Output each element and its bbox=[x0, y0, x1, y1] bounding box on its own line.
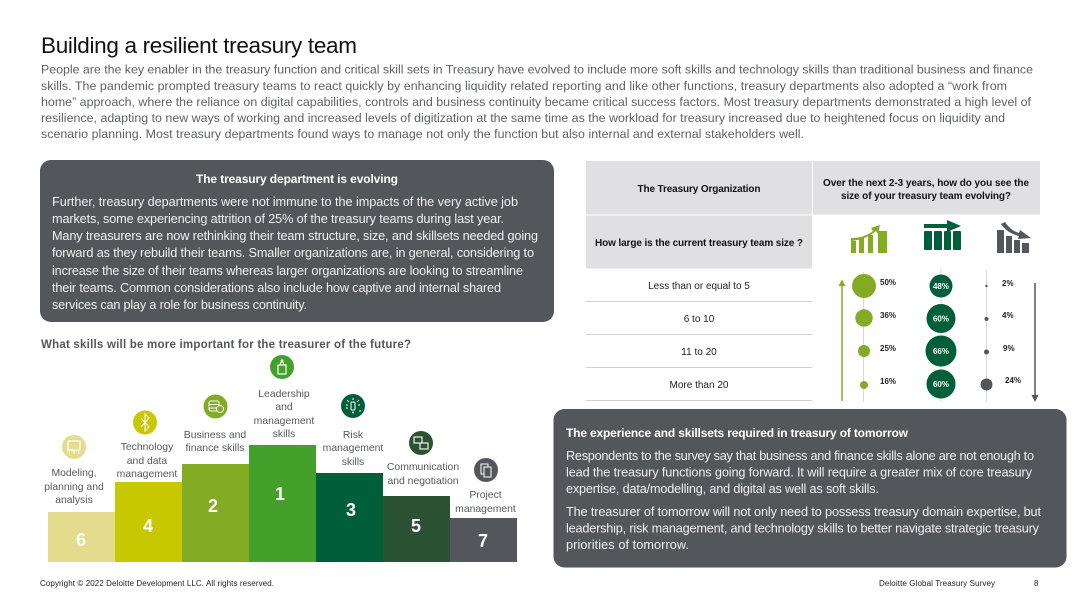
icon: presentation board bbox=[62, 435, 86, 459]
label: technology: Technology bbox=[121, 442, 174, 453]
label: business: Business and bbox=[184, 430, 246, 441]
label: leadership bbox=[254, 389, 314, 440]
icon: speech bubbles bbox=[409, 431, 433, 455]
label: project bbox=[455, 490, 516, 515]
header cell: team size question: How large is the current treasury team size ? bbox=[595, 238, 803, 249]
bar: rank 7 project: 7 bbox=[478, 531, 488, 551]
skills chart heading: What skills will be more important for the treasurer of the future? bbox=[41, 339, 411, 351]
label: modeling: analysis bbox=[55, 495, 93, 506]
panel body text: Further, treasury departments were not immune to the impacts of the very active job bbox=[52, 195, 518, 209]
icon: growth chart bbox=[851, 225, 887, 253]
icon: stable chart bbox=[924, 220, 961, 250]
panel body text: Many treasurers are now rethinking their team structure, size, and skillsets needed going bbox=[52, 229, 538, 243]
panel body text: lead the treasury functions going forward. It will require a greater mix of core treasury bbox=[566, 466, 1033, 480]
bar: rank 5 communication: 5 bbox=[411, 516, 421, 536]
label: project: management bbox=[455, 504, 516, 515]
chart: stable bubbles: 66% bbox=[933, 347, 949, 356]
panel: experience and skillsets bbox=[554, 409, 1066, 568]
label: technology bbox=[117, 442, 177, 480]
bar: rank 4 technology: 4 bbox=[143, 516, 153, 536]
label: communication bbox=[387, 462, 459, 487]
row labels: More than 20 bbox=[670, 380, 729, 391]
label: risk: skills bbox=[342, 457, 364, 468]
row labels bbox=[648, 281, 750, 391]
label: business bbox=[184, 430, 246, 454]
chart: increase bubbles: 36% bbox=[880, 311, 896, 320]
label: risk: management bbox=[323, 443, 383, 454]
panel body text: priorities of tomorrow. bbox=[566, 538, 689, 552]
chart: increase bubbles: 25% bbox=[880, 344, 896, 353]
footer: page number: 8 bbox=[1034, 579, 1039, 588]
label: risk: Risk bbox=[343, 430, 364, 441]
header cell: team size question bbox=[586, 216, 812, 268]
label: leadership: skills bbox=[273, 429, 295, 440]
label: technology: and data bbox=[127, 456, 167, 467]
label: modeling bbox=[44, 468, 104, 506]
chart: decrease bubbles: 24% bbox=[1005, 376, 1021, 385]
label: leadership: and bbox=[275, 402, 293, 413]
icon: finance coins bbox=[204, 394, 228, 418]
intro text block: People are the key enabler in the treasury function and critical skill sets in Treasury have evolved to include more soft skills and technology skills than traditional business and finance bbox=[41, 62, 1033, 76]
label: communication: Communication bbox=[387, 462, 459, 473]
label: leadership: Leadership bbox=[258, 389, 310, 400]
panel body text bbox=[52, 195, 538, 312]
intro text block: home” approach, where the reliance on digital capabilities, controls and business continuity became critical success factors. Most treasury departments demonstrated a high level of bbox=[41, 95, 1032, 109]
table: treasury organization bbox=[586, 161, 1040, 400]
bar: rank 3 risk: 3 bbox=[346, 500, 356, 520]
intro text block: resilience, adapting to new ways of working and increased levels of digitization at the same time as the workload for treasury increased due to heightened focus on liquidity and bbox=[41, 111, 1005, 125]
footer: copyright: Copyright © 2022 Deloitte Development LLC. All rights reserved. bbox=[40, 579, 274, 588]
label: business: finance skills bbox=[186, 443, 244, 454]
chart: decrease bubbles bbox=[980, 270, 1021, 402]
bar: rank 7 project bbox=[450, 518, 517, 562]
panel body text: Respondents to the survey say that business and finance skills alone are not enough to bbox=[566, 449, 1034, 463]
bar: rank 6 modeling bbox=[48, 512, 115, 562]
chart: increase bubbles bbox=[852, 272, 896, 402]
arrow: down bbox=[1032, 283, 1038, 402]
panel heading: The treasury department is evolving bbox=[196, 172, 398, 186]
chart: decrease bubbles: 4% bbox=[1002, 311, 1014, 320]
bar: rank 4 technology bbox=[115, 482, 182, 562]
chart: increase bubbles: 50% bbox=[880, 278, 896, 287]
bar: rank 5 communication bbox=[383, 496, 450, 562]
icon: risk bulb bbox=[341, 394, 365, 418]
panel body text: leadership, risk management, and technology skills to better navigate strategic treasury bbox=[566, 522, 1040, 536]
icon: declining chart bbox=[997, 222, 1031, 253]
title: Building a resilient treasury team bbox=[41, 33, 357, 58]
label: leadership: management bbox=[254, 416, 314, 427]
chart: decrease bubbles: 2% bbox=[1002, 279, 1014, 288]
header cell: next 2-3 years: Over the next 2-3 years, how do you see the bbox=[823, 178, 1029, 189]
bar: rank 3 risk bbox=[316, 473, 383, 562]
label: communication: and negotiation bbox=[387, 476, 459, 487]
intro text block: scenario planning. Most treasury departments found ways to manage not only the function but also internal and external stakeholders well. bbox=[41, 127, 804, 141]
chart: skills staircase bbox=[44, 355, 517, 562]
chart: stable bubbles: 60% bbox=[933, 380, 949, 389]
arrow: up bbox=[838, 280, 846, 401]
panel: the treasury department is evolving bbox=[40, 160, 554, 322]
panel body text: increase the size of their teams whereas larger organizations are looking to streamline bbox=[52, 264, 523, 278]
header cell: organization bbox=[586, 161, 812, 214]
header cell: next 2-3 years: size of your treasury team evolving? bbox=[841, 191, 1011, 202]
panel body text: services can play a role for business continuity. bbox=[52, 298, 307, 312]
panel body text: markets, some experiencing attrition of 25% of the treasury teams during last year. bbox=[52, 212, 504, 226]
chart: stable bubbles bbox=[926, 268, 956, 402]
panel body text: The treasurer of tomorrow will not only need to possess treasury domain expertise, but bbox=[566, 505, 1041, 519]
intro text block bbox=[41, 62, 1033, 141]
panel body text bbox=[566, 449, 1041, 552]
icon: bluetooth bbox=[133, 410, 157, 434]
panel body text: their teams. Common considerations also include how captive and internal shared bbox=[52, 281, 501, 295]
header cell: organization: The Treasury Organization bbox=[638, 184, 760, 195]
label: modeling: Modeling, bbox=[51, 468, 97, 479]
row labels: Less than or equal to 5 bbox=[648, 281, 750, 292]
bar: rank 1 leadership: 1 bbox=[275, 484, 285, 504]
row labels: 6 to 10 bbox=[684, 314, 715, 325]
bar: rank 2 business: 2 bbox=[208, 496, 218, 516]
chart: stable bubbles: 48% bbox=[933, 282, 949, 291]
panel body text: forward as they rebuild their teams. Smaller organizations are, in general, considering to bbox=[52, 246, 534, 260]
bar: rank 1 leadership bbox=[249, 445, 316, 562]
label: project: Project bbox=[469, 490, 502, 501]
icon: documents bbox=[474, 458, 498, 482]
header cell: next 2-3 years bbox=[813, 161, 1040, 214]
chart: stable bubbles: 60% bbox=[933, 314, 949, 324]
panel body text: expertise, data/modelling, and digital as well as soft skills. bbox=[566, 482, 879, 496]
chart: decrease bubbles: 9% bbox=[1003, 344, 1015, 353]
icon: leadership figure bbox=[270, 355, 294, 379]
intro text block: skills. The pandemic prompted treasury teams to react quickly by enhancing liquidity related reporting and like other functions, treasury departments also adopted a “work from bbox=[41, 79, 1007, 93]
chart: increase bubbles: 16% bbox=[880, 377, 896, 386]
bar: rank 2 business bbox=[182, 464, 249, 562]
row labels: 11 to 20 bbox=[681, 347, 717, 358]
label: modeling: planning and bbox=[44, 482, 104, 493]
label: risk bbox=[323, 430, 383, 468]
footer: survey name: Deloitte Global Treasury Survey bbox=[879, 579, 995, 588]
panel heading: The experience and skillsets required in treasury of tomorrow bbox=[566, 426, 909, 440]
bar: rank 6 modeling: 6 bbox=[76, 530, 86, 550]
label: technology: management bbox=[117, 469, 177, 480]
